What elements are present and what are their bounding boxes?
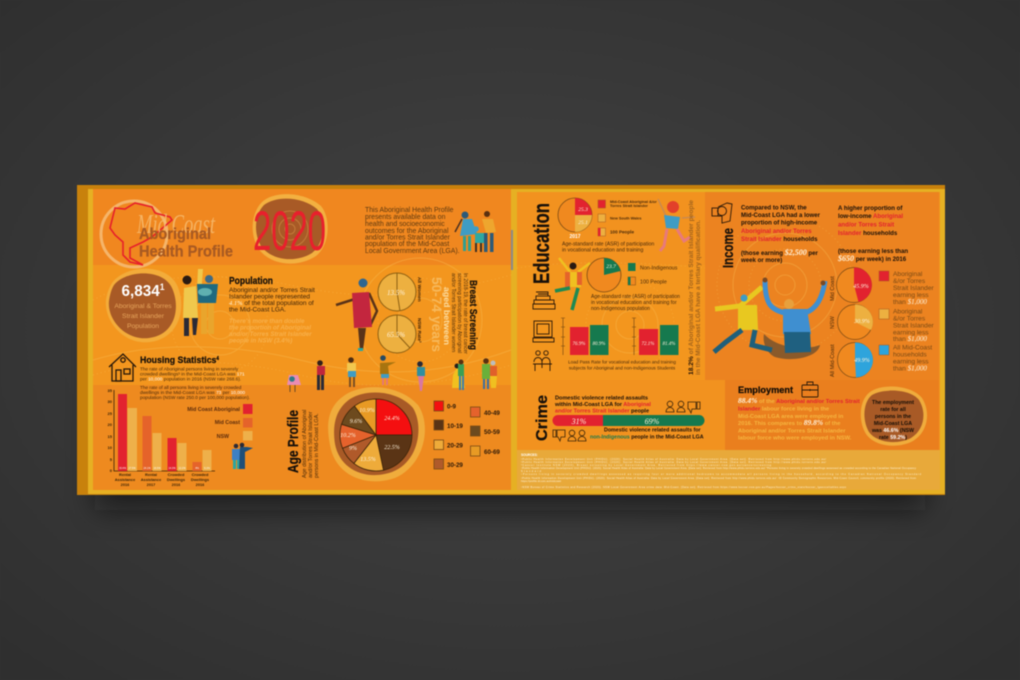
legend: income pies: Strait Islander bbox=[893, 322, 934, 330]
bar chart: housing: 12.2% bbox=[178, 467, 186, 470]
bar chart: housing: 15 bbox=[108, 434, 113, 439]
population text: the Mid-Coast LGA. bbox=[229, 306, 286, 314]
employment rate badge: Mid-Coast LGA bbox=[874, 421, 912, 427]
intro text: health and socioeconomic bbox=[365, 221, 445, 228]
population text bbox=[229, 287, 315, 314]
chart: income pies: 45.9% bbox=[853, 283, 869, 290]
bar chart: housing: Crowded bbox=[192, 472, 209, 477]
population badge: 6,834 bbox=[122, 283, 162, 300]
crime text: Aboriginal assaults bbox=[554, 396, 651, 414]
intro text: population of the Mid-Coast bbox=[365, 241, 449, 248]
caption: load pass rate: subjects for Aboriginal and non-Indigenous Students bbox=[569, 366, 676, 370]
sources panel: https://profile.id.com.au/midcoast bbox=[521, 480, 561, 483]
icon: briefcase bbox=[802, 382, 818, 397]
bar chart: housing: 33.4% bbox=[119, 467, 127, 470]
intro text: presents available data on bbox=[365, 214, 446, 221]
population text: 4.1% of the total population of bbox=[229, 300, 314, 307]
age profile description: Age distribution of Aboriginal bbox=[302, 410, 308, 478]
intro text: outcomes for the Aboriginal bbox=[365, 228, 449, 235]
bar chart: housing: Rental bbox=[145, 472, 157, 477]
caption: load pass rate bbox=[568, 360, 676, 370]
legend: age groups bbox=[434, 401, 500, 469]
income text: low income: (those earning less than bbox=[838, 248, 908, 255]
bar chart: housing: 10 bbox=[108, 445, 113, 450]
sources panel: ⁴Public Health Information Development Unit (PHIDU). (2020). Social Health Atlas of Australia: Data by Local Government Area. [Data set]. Retrieved from http://www.phidu.torrens.edu.au/ *Persons living in severely crowded dwellings assessed as crowded according to the Canadian National Occupancy bbox=[521, 466, 917, 470]
income text: high income: Compared to NSW, the bbox=[741, 204, 807, 212]
employment rate badge: persons in the bbox=[875, 414, 911, 420]
legend: vocational participation bbox=[598, 200, 657, 236]
legend: housing chart bbox=[187, 404, 252, 440]
bar: domestic violence proportions: 69% bbox=[645, 417, 660, 426]
heading: Age Profile: Age Profile bbox=[285, 410, 302, 473]
bar chart: housing: 5 bbox=[110, 457, 113, 462]
employment rate badge bbox=[861, 386, 927, 446]
chart: non-Indigenous pie bbox=[587, 258, 621, 292]
population callout: people in NSW (3.4%) bbox=[228, 338, 292, 344]
employment text: Aboriginal and/or Torres Strait Islander bbox=[738, 428, 846, 434]
income text: low income: low-income Aboriginal bbox=[838, 213, 903, 220]
bar chart: housing bbox=[108, 388, 215, 487]
population badge bbox=[106, 269, 181, 342]
population badge: 1 bbox=[160, 282, 164, 292]
bar chart: housing: 14.3% bbox=[168, 467, 176, 470]
bar chart: housing: Assistance bbox=[115, 477, 136, 482]
legend: vocational participation: Torres Strait Islander bbox=[610, 204, 648, 208]
housing text: crowded dwellings bbox=[140, 372, 178, 376]
age profile description bbox=[302, 410, 320, 478]
chart: breast screening pies: 65.5% bbox=[387, 331, 405, 339]
legend: housing chart: Mid Coast Aboriginal bbox=[187, 407, 241, 413]
chart: age pie: 10.2% bbox=[340, 433, 356, 439]
chart: non-Indigenous pie: 23.7 bbox=[606, 264, 616, 270]
chart: income pies: Mid Coast bbox=[830, 276, 836, 301]
title: Aboriginal bbox=[139, 226, 211, 243]
illustration: row of people bbox=[287, 355, 497, 392]
crime text: non-Indigenous assaults bbox=[590, 428, 704, 440]
chart: vocational pie 2017: 2017 bbox=[569, 234, 581, 240]
bar chart: housing: Dwellings bbox=[167, 477, 185, 482]
breast screening text: aged between bbox=[442, 287, 451, 345]
bar chart: housing: 4% bbox=[195, 467, 200, 470]
icon: books bbox=[533, 292, 555, 309]
bar chart: housing: 2016 bbox=[196, 482, 205, 487]
income text: high income: proportion of high-income bbox=[741, 220, 818, 226]
legend: income pies: earning less bbox=[893, 292, 929, 299]
crime text: non-Indigenous assaults: non-Indigenous people in the Mid-Coast LGA bbox=[590, 434, 704, 440]
legend: age groups: 60-69 bbox=[484, 449, 500, 456]
bar chart: load pass rate 2: 72.1% bbox=[642, 342, 654, 347]
population text: Aboriginal and/or Torres Strait bbox=[229, 287, 315, 294]
legend: income pies: earning less bbox=[893, 330, 929, 336]
employment rate badge: was 46.6% (NSW bbox=[871, 428, 914, 434]
chart: income pies: 49.9% bbox=[854, 357, 870, 364]
icon: woman in red dress bbox=[336, 278, 377, 351]
heading: Housing Statistics: 4 bbox=[216, 356, 219, 362]
bar chart: housing: 2016 bbox=[121, 482, 130, 487]
legend: income pies: Aboriginal bbox=[893, 271, 923, 278]
legend: income pies: than $1,000 bbox=[893, 335, 927, 343]
sources panel: SOURCES: bbox=[521, 453, 538, 457]
legend: non-Indigenous: 100 People bbox=[640, 280, 667, 286]
sources panel: ²Public Health Information Development Unit (PHIDU). (2020). Social Health Atlas of Australia: Data by Local Government Area. [Data set]. Retrieved from http://www.phidu.torrens.edu.au/ bbox=[521, 461, 826, 464]
chart: age pie: 9% bbox=[349, 446, 357, 452]
bar chart: housing: 27.5% bbox=[128, 467, 136, 470]
chart: breast screening pies: All Women bbox=[416, 277, 422, 302]
illustration: jumping woman with red hair bbox=[658, 199, 695, 251]
bar chart: housing: 20 bbox=[108, 422, 113, 427]
breast screening text: and/or Torres Strait Islander women bbox=[450, 273, 456, 352]
population badge: Aboriginal & Torres bbox=[114, 303, 172, 310]
employment rate badge: rate for all bbox=[880, 407, 906, 413]
chart: age pie: 22.5% bbox=[384, 445, 400, 451]
intro text: and/or Torres Strait Islander bbox=[365, 234, 451, 242]
bar chart: housing: 25 bbox=[108, 411, 113, 416]
age profile description: and/or Torres Strait Islander bbox=[308, 411, 314, 478]
bar chart: housing: Crowded bbox=[168, 472, 185, 477]
title bbox=[136, 209, 233, 260]
income text: low income: A higher proportion of bbox=[838, 205, 903, 212]
callout: tertiary qualification bbox=[688, 199, 702, 375]
caption: non-Indigenous participation bbox=[591, 294, 680, 312]
chart: breast screening pies: 13.5% bbox=[387, 289, 405, 297]
chart: breast screening pies bbox=[378, 273, 422, 353]
chart: age pie: 10.9% bbox=[359, 408, 375, 414]
caption: non-Indigenous participation: in vocational education and training for bbox=[591, 300, 677, 306]
employment text: Mid-Coast LGA area were employed in bbox=[738, 414, 844, 420]
icon: house bbox=[109, 354, 136, 381]
sources panel: ⁸NSW Bureau of Crime Statistics and Research (2020). NSW Local Government Area crime data: Mid-Coast. [Data set]. Retrieved from https://www.bocsar.nsw.gov.au/Pages/bocsar_crime_stats/bocsar_lgaexceltables.aspx bbox=[521, 485, 847, 489]
legend: age groups: 40-49 bbox=[484, 410, 500, 417]
bar: domestic violence proportions bbox=[553, 415, 704, 426]
icon: two people pointing bbox=[232, 443, 253, 469]
intro text bbox=[365, 207, 460, 255]
chart: income pies: 30.9% bbox=[853, 319, 870, 325]
population callout bbox=[228, 318, 312, 344]
title: Health Profile bbox=[139, 244, 233, 260]
income text: low income: and/or Torres Strait bbox=[838, 222, 894, 228]
legend: income pies: than $1,000 bbox=[893, 364, 927, 372]
bar chart: housing: 2017 bbox=[147, 482, 155, 487]
housing text: in the Mid-Coast LGA was 171 bbox=[181, 372, 245, 376]
callout: tertiary qualification: 18.2% of Aboriginal and/or Torres Strait Islander people bbox=[688, 199, 695, 375]
bar chart: housing: 9.1% bbox=[204, 467, 211, 470]
icons: thumbs down and people (bottom) bbox=[553, 430, 586, 441]
heading: Population: Population bbox=[229, 276, 273, 287]
legend: income pies: Strait Islander bbox=[893, 285, 934, 292]
bar chart: housing: 24.1% bbox=[143, 467, 151, 470]
legend: income pies: &/or Torres bbox=[893, 316, 926, 322]
sources panel: ⁵Persons living in severely crowded dwellings assessed as requiring four or more additional bedrooms to accommodate all persons living in the household, according to the Canadian National Occupancy Standard bbox=[521, 472, 922, 476]
crime text: non-Indigenous assaults: Domestic violence related assaults for bbox=[604, 428, 701, 434]
title: Mid Coast bbox=[136, 209, 216, 239]
sources panel: ³Cancer Institute NSW (2020). Breast screening by Local Government Area. Retrieved from https://www.cancer.nsw.gov.au/cancerscreening bbox=[521, 464, 772, 467]
chart: age pie: 24.4% bbox=[384, 415, 400, 422]
intro text: Local Government Area (LGA). bbox=[365, 248, 460, 255]
sources panel bbox=[517, 450, 940, 490]
income text: low income: Islander households bbox=[838, 230, 898, 237]
breast screening text: 50-74 years bbox=[429, 277, 445, 352]
legend: age groups: 30-29 bbox=[447, 462, 463, 469]
crime text: Aboriginal assaults: Domestic violence related assaults bbox=[555, 396, 648, 402]
bar chart: housing: 16.5% bbox=[153, 467, 161, 470]
chart: age pie: 9.6% bbox=[350, 419, 362, 425]
legend: vocational participation: Mid-Coast Aboriginal &/or bbox=[610, 200, 657, 204]
income text: low income: $650 per week) in 2016 bbox=[837, 254, 907, 263]
icon: computer bbox=[533, 321, 554, 342]
breast screening text: In 2018-19, the rate of breast cancer bbox=[462, 273, 468, 354]
icon: classroom people bbox=[533, 351, 552, 371]
employment rate badge: rate 59.2%) bbox=[879, 435, 907, 441]
bar chart: housing: 35 bbox=[108, 388, 113, 393]
housing text: per 10,000 population in 2016 (NSW rate 268.6). bbox=[140, 376, 241, 382]
icon: couple illustration bbox=[182, 269, 218, 336]
bar chart: load pass rate 1 bbox=[561, 318, 608, 355]
income text: high income bbox=[740, 204, 821, 264]
breast screening text: screening participation by Aboriginal bbox=[456, 273, 462, 353]
chart: income pies bbox=[830, 267, 873, 378]
caption: load pass rate: Load Pass Rate for vocational education and training bbox=[568, 360, 676, 364]
income text: low income bbox=[837, 205, 908, 263]
legend: non-Indigenous bbox=[628, 263, 678, 286]
population callout: and/or Torres Strait Islander bbox=[229, 331, 312, 338]
icon: money in hand bbox=[712, 203, 732, 223]
bar chart: housing: 0 bbox=[110, 468, 113, 473]
chart: breast screening pies: 3 bbox=[418, 341, 422, 343]
illustration: two people jumping bbox=[714, 278, 826, 359]
income text: high income: Mid-Coast LGA had a lower bbox=[741, 212, 821, 219]
legend: income pies: All Mid-Coast bbox=[893, 344, 932, 352]
caption: vocational participation: in vocational education and training bbox=[562, 248, 643, 254]
bar chart: load pass rate 2: 81.4% bbox=[663, 342, 675, 347]
legend: age groups: 10-19 bbox=[447, 423, 463, 430]
legend: housing chart: Mid Coast bbox=[215, 420, 240, 426]
legend: age groups: 0-9 bbox=[447, 404, 457, 410]
chart: income pies: NSW bbox=[830, 315, 836, 329]
population callout: the proportion of Aboriginal bbox=[229, 324, 311, 332]
legend: income pies: than $1,000 bbox=[893, 298, 927, 306]
bar chart: housing: 2016 bbox=[172, 482, 181, 487]
housing text: dwellings in the Mid-Coast LGA was 73 per 10,000 bbox=[140, 390, 245, 395]
legend: income pies: Aboriginal bbox=[893, 308, 923, 316]
bar: domestic violence proportions: 31% bbox=[571, 417, 587, 426]
population badge: Population bbox=[127, 323, 159, 330]
population callout: There's more than double bbox=[229, 318, 305, 325]
chart: age pie bbox=[328, 387, 425, 481]
crime text: Aboriginal assaults: within Mid-Coast LGA for Aboriginal bbox=[554, 402, 651, 408]
bar chart: housing: Assistance bbox=[141, 477, 162, 482]
legend: income pies bbox=[879, 271, 934, 372]
bar chart: housing: 30 bbox=[108, 399, 113, 404]
employment text: Islander labour force living in the bbox=[738, 406, 830, 412]
heading: Education: Education bbox=[529, 203, 554, 284]
housing text: population (NSW rate 250.0 per 100,000 population). bbox=[140, 395, 250, 400]
chart: vocational pie 2017: 25.3 bbox=[578, 207, 588, 213]
bar chart: housing: Dwellings bbox=[191, 477, 209, 482]
population text: Islander people represented bbox=[229, 294, 310, 300]
sources panel: ¹Public Health Information Development Unit (PHIDU). (2020). Social Health Atlas of Australia: Data by Local Government Area. [Data set]. Retrieved from http://www.phidu.torrens.edu.au/ bbox=[521, 458, 826, 461]
income text: high income: Aboriginal and/or Torres bbox=[741, 228, 812, 235]
crime text: Aboriginal assaults: and/or Torres Strait Islander people bbox=[555, 408, 649, 414]
employment text: 88.4% of the Aboriginal and/or Torres Strait bbox=[738, 396, 860, 405]
legend: vocational participation: New South Wales bbox=[610, 216, 642, 220]
employment text: 2016. This compares to 89.8% of the bbox=[738, 418, 841, 427]
sources panel: ⁶Public Health Information Development Unit (PHIDU). (2020). Social Health Atlas of Australia: Data by Local Government Area. [Data set]. Retrieved from http://www.phidu.torrens.edu.au/ ⁷ID Community Demographic Resources. Mid-Coast Council, community profile (2020). Retrieved from bbox=[521, 476, 916, 480]
caption: non-Indigenous participation: Age-standard rate (ASR) of participation bbox=[591, 294, 680, 300]
heading: Crime: Crime bbox=[534, 395, 551, 441]
bar chart: load pass rate 2 bbox=[632, 318, 678, 355]
panel: left page bbox=[77, 185, 511, 495]
income text: high income: (those earning $2,500 per bbox=[741, 248, 818, 257]
housing text: The rate of all persons living in severely crowded bbox=[140, 385, 242, 390]
population badge: Strait Islander bbox=[122, 313, 165, 320]
legend: age groups: 20-29 bbox=[447, 442, 463, 450]
legend: income pies: earning less bbox=[893, 358, 929, 366]
icon: Mid Coast map outline bbox=[101, 201, 172, 267]
panel: right page bbox=[511, 185, 945, 495]
legend: income pies: households bbox=[893, 352, 927, 358]
illustration: dancing man bbox=[555, 258, 590, 310]
sources panel: Standard bbox=[521, 470, 542, 473]
callout: tertiary qualification: in the Mid-Coast LGA have a tertiary qualification. bbox=[695, 220, 702, 375]
housing text bbox=[140, 366, 250, 400]
caption: non-Indigenous participation: non-Indigenous population bbox=[591, 306, 650, 312]
bar chart: load pass rate 1: 80.9% bbox=[593, 342, 605, 347]
housing text: 5 bbox=[178, 372, 180, 376]
legend: non-Indigenous: Non-Indigenous bbox=[640, 266, 678, 272]
bar chart: load pass rate 1: 76.9% bbox=[573, 342, 585, 347]
heading: Housing Statistics: Housing Statistics bbox=[140, 355, 223, 366]
age profile description: persons in Mid-Coast LGA. bbox=[314, 413, 320, 478]
year badge 2020 bbox=[253, 194, 328, 264]
income text: high income: week or more) bbox=[740, 257, 782, 264]
bar chart: housing: Rental bbox=[119, 472, 131, 477]
chart: vocational pie 2017: 25.1 bbox=[578, 220, 588, 226]
employment rate badge: The employment bbox=[872, 400, 914, 406]
legend: income pies: &/or Torres bbox=[893, 278, 926, 285]
legend: housing chart: NSW bbox=[217, 434, 229, 440]
caption: vocational participation bbox=[562, 242, 654, 254]
caption: vocational participation: Age-standard rate (ASR) of participation bbox=[562, 242, 654, 248]
chart: breast screening pies: NSW Rate bbox=[416, 318, 421, 341]
legend: vocational participation: 100 People bbox=[610, 230, 634, 234]
chart: income pies: All Mid-Coast bbox=[830, 344, 836, 377]
employment text bbox=[738, 396, 860, 442]
housing text: The rate of Aboriginal persons living in severely bbox=[140, 366, 239, 372]
breast screening text bbox=[429, 273, 479, 354]
breast screening text: Breast Screening bbox=[467, 280, 479, 350]
legend: age groups: 50-59 bbox=[484, 429, 500, 436]
heading: Income: Income bbox=[720, 228, 737, 268]
icon: family illustration bbox=[455, 211, 496, 252]
employment text: labour force who were employed in NSW. bbox=[738, 436, 852, 442]
icons: people and thumbs down (top) bbox=[666, 401, 700, 413]
year badge 2020: 2020 bbox=[253, 199, 326, 262]
income text: high income: Strait Islander households bbox=[741, 236, 818, 243]
chart: age pie: 13.5% bbox=[360, 457, 376, 463]
intro text: This Aboriginal Health Profile bbox=[365, 207, 454, 214]
heading: Employment: Employment bbox=[738, 385, 794, 396]
chart: vocational pie 2017 bbox=[558, 198, 592, 240]
